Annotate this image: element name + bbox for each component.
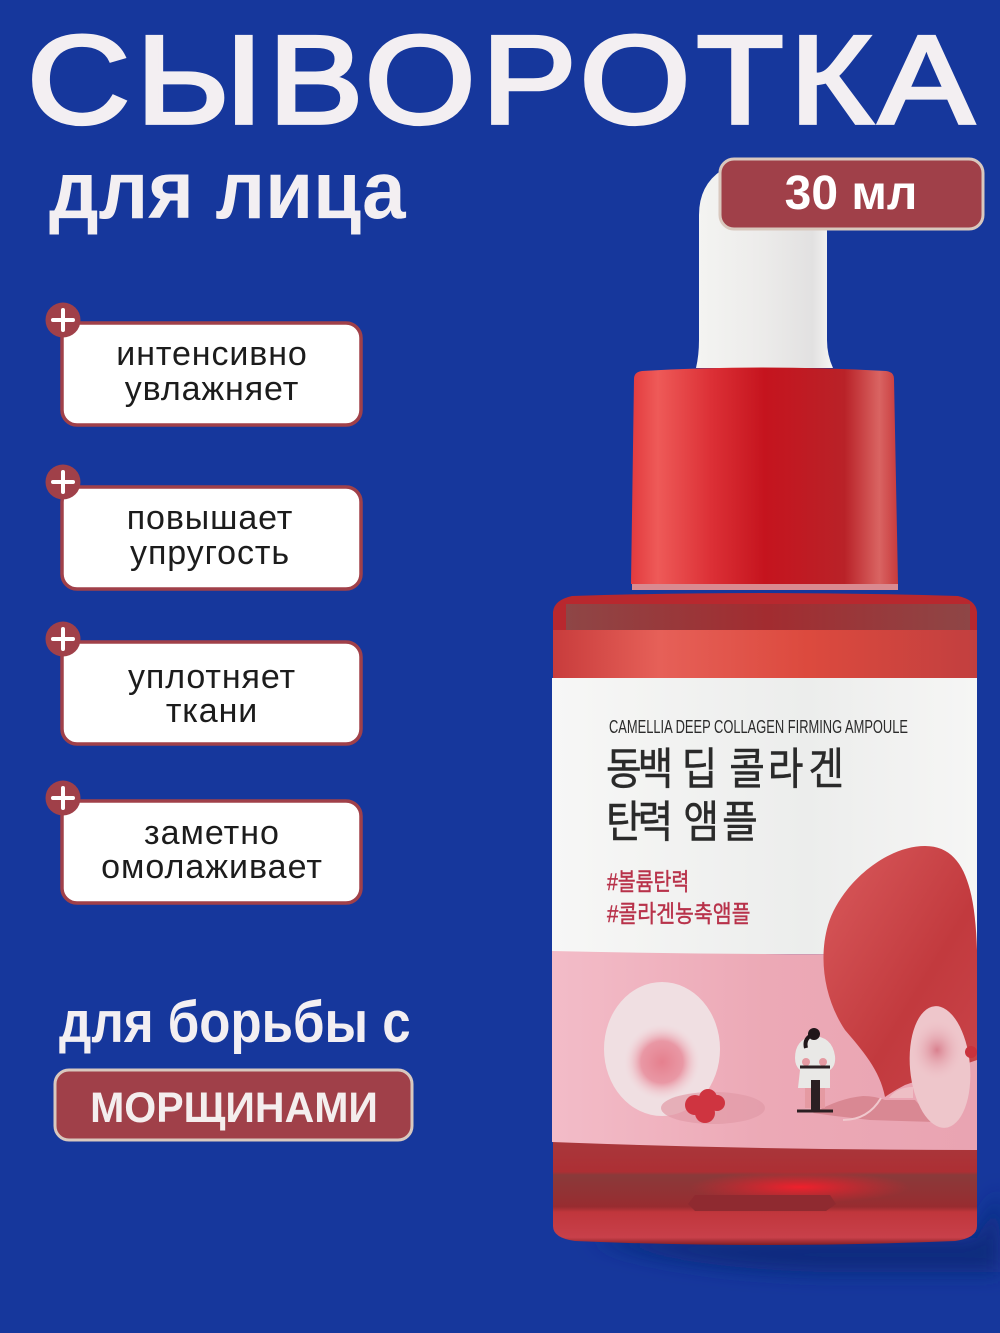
icon: plus badge (46, 464, 80, 500)
big sphere left (604, 982, 720, 1116)
shoulder dark band (566, 604, 970, 632)
product bottle (552, 170, 977, 1245)
icon: plus badge (46, 302, 80, 338)
label white area (552, 678, 977, 954)
bottle shoulder (553, 593, 977, 680)
caption: for fighting: для борьбы с (59, 990, 411, 1055)
balloon tube (843, 1098, 881, 1120)
label hashtag 2: #콜라겐농축앰플 (607, 901, 750, 927)
small berries (965, 1046, 977, 1058)
scientist figure (795, 1028, 835, 1111)
sphere shadow (661, 1092, 765, 1124)
label hashtag 1: #볼륨탄력 (607, 868, 689, 895)
volume badge (720, 159, 983, 229)
label korean name line 1: 동백 딥 콜라겐 (606, 744, 844, 794)
label pink area (552, 951, 977, 1150)
label korean name line 2: 탄력 앰플 (606, 797, 758, 847)
base inset (688, 1195, 836, 1211)
light bump (889, 1087, 913, 1098)
card text: омолаживает (101, 848, 323, 886)
icon: plus badge (46, 622, 80, 656)
card text: уплотняет (128, 658, 296, 696)
ground mound (813, 1096, 935, 1122)
card text: увлажняет (125, 370, 299, 408)
large balloon (823, 846, 977, 1097)
benefit card: moisturizes (46, 302, 361, 425)
card text: ткани (166, 692, 258, 730)
liquid band (553, 630, 977, 680)
bottle base (553, 1140, 977, 1245)
benefit card: rejuvenates (46, 780, 361, 903)
base glow (690, 1171, 910, 1203)
card text: упругость (130, 534, 290, 572)
bottle neck (632, 584, 898, 590)
title: СЫВОРОТКА (27, 10, 980, 150)
subtitle: для лица (49, 143, 407, 235)
benefit card: elasticity (46, 464, 361, 589)
card text: повышает (127, 499, 293, 537)
card text: интенсивно (116, 335, 308, 373)
dropper bulb (696, 170, 833, 368)
benefit card: firms (46, 622, 361, 744)
red cap (631, 368, 898, 584)
berries (685, 1089, 725, 1123)
icon: plus badge (46, 780, 80, 816)
wrinkles pill (55, 1070, 412, 1140)
wrinkles pill: МОРЩИНАМИ (90, 1083, 378, 1131)
card text: заметно (144, 814, 280, 852)
bottle shadow (590, 1190, 1000, 1272)
volume badge: 30 мл (785, 167, 917, 220)
small sphere right (905, 1004, 975, 1130)
